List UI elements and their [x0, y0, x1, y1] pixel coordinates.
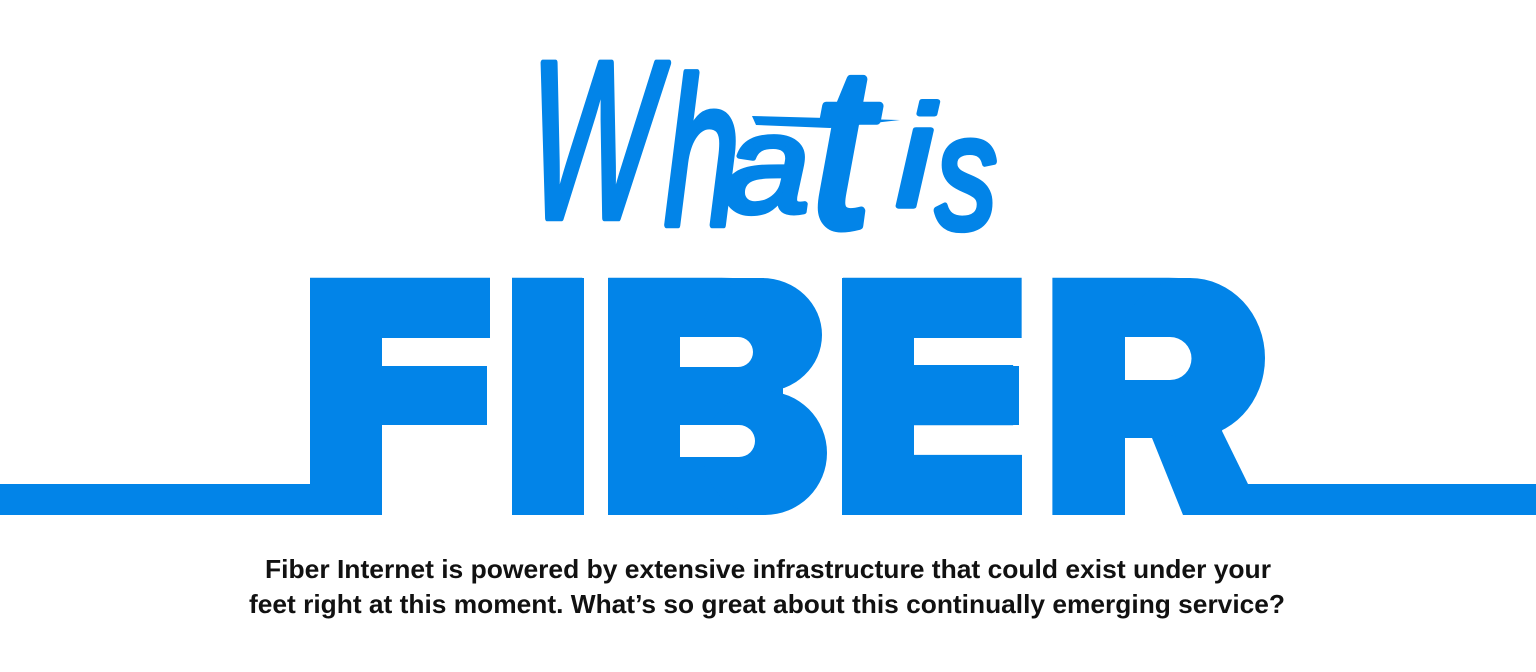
title: What is: t: [812, 20, 880, 274]
title: FIBER: B: [600, 225, 829, 568]
intro text: Fiber Internet is powered by extensive infrastructure that could exist under your: [265, 554, 1271, 584]
intro text: feet right at this moment. What’s so great about this continually emerging service?: [249, 589, 1285, 619]
title: What is: [524, 16, 997, 274]
intro text: [249, 554, 1285, 619]
title: What is: i: [896, 76, 938, 237]
title: FIBER: R: [1045, 225, 1262, 568]
title: FIBER: I: [504, 225, 590, 568]
title: FIBER: F: [302, 225, 490, 568]
title: FIBER: [302, 224, 1265, 568]
title: What is: a: [724, 87, 810, 242]
title: What is: W: [524, 16, 671, 266]
fiber line: right: [1248, 484, 1536, 515]
title: What is: h: [664, 34, 740, 270]
title: What is: s: [936, 82, 997, 263]
title: FIBER: E: [836, 224, 1026, 567]
fiber line: left: [0, 484, 382, 515]
